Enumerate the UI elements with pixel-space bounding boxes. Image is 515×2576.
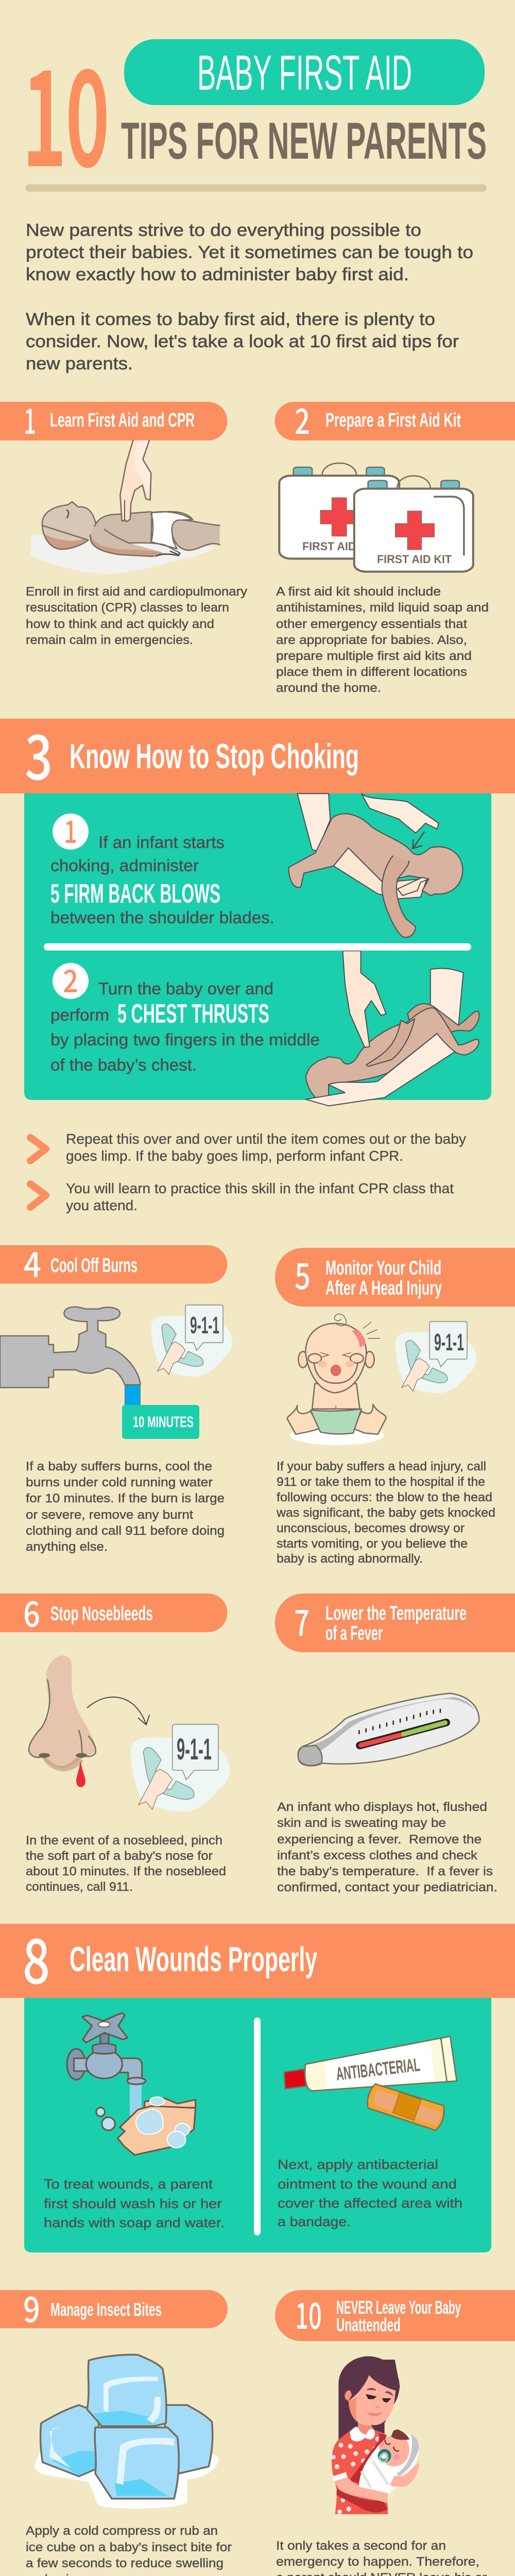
tip 10 body text: emergency to happen. Therefore, — [276, 2555, 479, 2569]
tip 5 body text: baby is acting abnormally. — [277, 1552, 423, 1566]
icon: first aid kits: FIRST AID KIT — [377, 553, 452, 566]
illustration: ice cubes — [35, 2354, 218, 2509]
tip 4 number: 4 — [24, 1236, 41, 1287]
tip 4 body text — [26, 1460, 225, 1554]
illustration: ointment and bandage: ANTIBACTERIAL — [335, 2054, 421, 2084]
tip 5 body text: If your baby suffers a head injury, call — [277, 1460, 486, 1473]
tip 9 number: 9 — [23, 2281, 40, 2332]
intro text: protect their babies. Yet it sometimes can be tough to — [26, 243, 473, 262]
tip 1 number: 1 — [24, 393, 36, 444]
panel: tip 2 — [275, 393, 515, 695]
note 1 — [30, 1131, 466, 1164]
icon: phone 9-1-1: 9-1-1 — [177, 1733, 212, 1766]
intro text: When it comes to baby first aid, there is plenty to — [26, 310, 435, 329]
illustration: CPR on infant — [31, 440, 220, 574]
tip 9 body text: Apply a cold compress or rub an — [26, 2524, 218, 2538]
tip 8 left text — [44, 2176, 225, 2230]
tip 7 header bar — [275, 1594, 515, 1652]
tip 9 body text: ice cube on a baby's insect bite for — [26, 2540, 232, 2554]
tip 1 body text: Enroll in first aid and cardiopulmonary — [26, 585, 247, 599]
tip 4 body text: clothing and call 911 before doing — [26, 1524, 225, 1538]
tip 5 body text: unconscious, becomes drowsy or — [277, 1521, 465, 1535]
illustration: mother holding baby — [331, 2356, 419, 2514]
panel: tip 8 wounds — [0, 1912, 515, 2252]
tip 6 number: 6 — [23, 1586, 40, 1637]
tip 5 heading: After A Head Injury — [325, 1277, 442, 1299]
tip 3 header bar — [0, 719, 515, 793]
tip 8 teal panel — [24, 1994, 491, 2252]
tip 6 body text: In the event of a nosebleed, pinch — [26, 1834, 222, 1848]
intro text: new parents. — [26, 354, 133, 374]
tip 8 right text: ointment to the wound and — [278, 2176, 457, 2192]
tip 7 body text — [277, 1800, 497, 1894]
panel: tip 9 — [0, 2281, 232, 2576]
tip 2 number: 2 — [295, 393, 310, 444]
illustration: ointment and bandage — [284, 2036, 457, 2130]
note 2: you attend. — [66, 1197, 138, 1213]
tip 7 body text: the baby’s temperature. If a fever is — [277, 1865, 493, 1878]
tip 6 body text — [26, 1834, 226, 1894]
tip 1 header bar — [0, 402, 228, 440]
note 2: You will learn to practice this skill in the infant CPR class that — [66, 1180, 454, 1196]
tip 4 body text: burns under cold running water — [26, 1476, 213, 1489]
tip 2 body text: prepare multiple first aid kits and — [276, 649, 472, 663]
intro text: consider. Now, let's take a look at 10 first aid tips for — [26, 332, 459, 351]
icon: running tap — [0, 1307, 199, 1439]
tip 5 body text: following occurs: the blow to the head — [277, 1490, 492, 1504]
tip 8 left text: hands with soap and water. — [44, 2215, 225, 2230]
tip 5 body text — [276, 1460, 495, 1566]
step 2 text: Turn the baby over and — [98, 979, 273, 998]
tip 1 heading: Learn First Aid and CPR — [50, 410, 195, 431]
icon: first aid kits — [279, 463, 473, 572]
tip 6 body text: about 10 minutes. If the nosebleed — [26, 1865, 226, 1878]
step 2 text: of the baby’s chest. — [50, 1056, 197, 1074]
note 2 — [30, 1180, 454, 1213]
tip 5 number: 5 — [295, 1248, 311, 1300]
note 1: Repeat this over and over until the item comes out or the baby — [66, 1131, 466, 1147]
tip 2 body text — [276, 585, 489, 695]
tip 8 left text: first should wash his or her — [44, 2196, 222, 2211]
big number 10: 10 — [23, 14, 109, 202]
icon: phone 9-1-1 — [396, 1321, 476, 1393]
tip 2 body text: antihistamines, mild liquid soap and — [276, 601, 489, 615]
panel: tip 5 — [275, 1248, 515, 1566]
tip 1 body text: resuscitation (CPR) classes to learn — [26, 601, 229, 615]
tip 3 teal panel — [24, 788, 491, 1100]
tip 10 number: 10 — [295, 2287, 322, 2340]
panel: tip 6 — [0, 1586, 230, 1894]
icon: phone 9-1-1 — [151, 1305, 232, 1377]
tip 9 heading: Manage Insect Bites — [50, 2299, 162, 2320]
title pill — [124, 39, 485, 105]
illustration: nosebleed — [29, 1655, 149, 1787]
tip 8 right text — [278, 2157, 462, 2229]
icon: running tap: 10 MINUTES — [133, 1414, 194, 1431]
step 1 badge: 1 — [64, 807, 77, 852]
step 2 text: 5 CHEST THRUSTS — [117, 999, 269, 1029]
tip 7 body text: infant’s excess clothes and check — [277, 1849, 478, 1862]
tip 5 body text: starts vomiting, or you believe the — [277, 1537, 468, 1551]
note 1: goes limp. If the baby goes limp, perform infant CPR. — [66, 1148, 403, 1164]
step 2 text: perform — [50, 1006, 109, 1024]
tip 5 body text: 911 or take them to the hospital if the — [277, 1475, 485, 1489]
tip 8 right text: cover the affected area with — [278, 2195, 462, 2211]
title block — [23, 14, 487, 202]
tip 4 body text: anything else. — [26, 1540, 108, 1554]
tip 4 header bar — [0, 1245, 227, 1284]
tip 7 heading: of a Fever — [325, 1622, 383, 1645]
step 1 text: choking, administer — [50, 856, 199, 875]
icon: first aid kits: FIRST AID KIT — [302, 540, 377, 553]
intro text — [26, 221, 473, 374]
tip 3 heading: Know How to Stop Choking — [70, 737, 359, 776]
tip 3 number: 3 — [25, 708, 53, 798]
tip 1 body text: remain calm in emergencies. — [26, 633, 193, 647]
tip 9 header bar — [0, 2290, 228, 2328]
tip 7 number: 7 — [294, 1595, 310, 1647]
tip 6 body text: continues, call 911. — [26, 1880, 133, 1894]
tip 2 body text: around the home. — [276, 681, 381, 695]
tip 4 body text: If a baby suffers burns, cool the — [26, 1460, 212, 1473]
tip 8 left text: To treat wounds, a parent — [44, 2176, 213, 2192]
tip 5 heading — [325, 1257, 442, 1299]
icon: phone 9-1-1: 9-1-1 — [434, 1329, 464, 1355]
tip 9 body text: a few seconds to reduce swelling — [26, 2556, 224, 2570]
tip 8 right text: Next, apply antibacterial — [278, 2157, 438, 2172]
illustration: chest thrusts — [305, 951, 479, 1106]
panel: tip 7 — [275, 1594, 515, 1894]
tip 9 body text — [26, 2524, 232, 2576]
tip 6 body text: the soft part of a baby's nose for — [26, 1849, 213, 1863]
tip 7 heading — [325, 1602, 467, 1645]
tip 2 body text: other emergency essentials that — [276, 617, 467, 631]
tip 7 body text: experiencing a fever. Remove the — [277, 1833, 482, 1846]
tip 10 body text — [276, 2539, 487, 2576]
tip 2 body text: are appropriate for babies. Also, — [276, 633, 467, 647]
tip 2 body text: place them in different locations — [276, 665, 467, 679]
tip 6 header bar — [0, 1594, 228, 1632]
illustration: washing hands at tap — [67, 2013, 196, 2155]
panel: tip 3 choking — [0, 708, 515, 1213]
step 1 text: between the shoulder blades. — [50, 908, 274, 927]
tip 10 heading: Unattended — [336, 2314, 401, 2335]
tip 6 heading: Stop Nosebleeds — [50, 1603, 153, 1625]
tip 2 header bar — [275, 402, 515, 440]
tip 10 body text: It only takes a second for an — [276, 2539, 446, 2553]
tip 10 header bar — [275, 2290, 515, 2341]
tip 2 body text: A first aid kit should include — [276, 585, 441, 599]
icon: phone 9-1-1 — [131, 1724, 230, 1812]
step 1 badge — [53, 807, 89, 852]
step 1 text: 5 FIRM BACK BLOWS — [50, 879, 220, 909]
tip 4 body text: for 10 minutes. If the burn is large — [26, 1492, 225, 1505]
intro text: know exactly how to administer baby first aid. — [26, 265, 409, 284]
tip 1 body text: how to think and act quickly and — [26, 617, 214, 631]
tip 7 body text: An infant who displays hot, flushed — [277, 1800, 487, 1814]
tip 8 right text: a bandage. — [278, 2214, 351, 2229]
icon: phone 9-1-1: 9-1-1 — [190, 1312, 219, 1338]
step 2 badge: 2 — [63, 957, 78, 1002]
intro text: New parents strive to do everything possible to — [26, 221, 421, 240]
tip 4 heading: Cool Off Burns — [50, 1255, 138, 1277]
tip 7 body text: skin and is sweating may be — [277, 1816, 446, 1830]
tip 5 header bar — [275, 1248, 515, 1307]
tip 7 body text: confirmed, contact your pediatrician. — [277, 1880, 497, 1894]
step 1 text — [50, 833, 274, 927]
tip 5 heading: Monitor Your Child — [325, 1257, 441, 1279]
illustration: crying baby — [287, 1314, 386, 1445]
panel: tip 4 — [0, 1236, 232, 1554]
step 2 text: by placing two fingers in the middle — [50, 1030, 320, 1049]
panel: tip 1 — [0, 393, 247, 647]
step 1 text: If an infant starts — [98, 833, 225, 852]
tip 8 header bar — [0, 1924, 515, 1998]
step 2 badge — [53, 957, 89, 1002]
tip 5 body text: was significant, the baby gets knocked — [276, 1506, 495, 1520]
icon: thermometer — [298, 1693, 479, 1766]
tip 1 body text — [26, 585, 247, 647]
tip 10 heading — [336, 2297, 461, 2335]
illustration: back blows — [288, 793, 462, 937]
tip 4 body text: or severe, remove any burnt — [26, 1508, 193, 1522]
tip 8 number: 8 — [23, 1912, 50, 2002]
step 2 text — [50, 979, 320, 1074]
panel: tip 10 — [275, 2287, 515, 2576]
tip 8 heading: Clean Wounds Properly — [70, 1940, 317, 1979]
